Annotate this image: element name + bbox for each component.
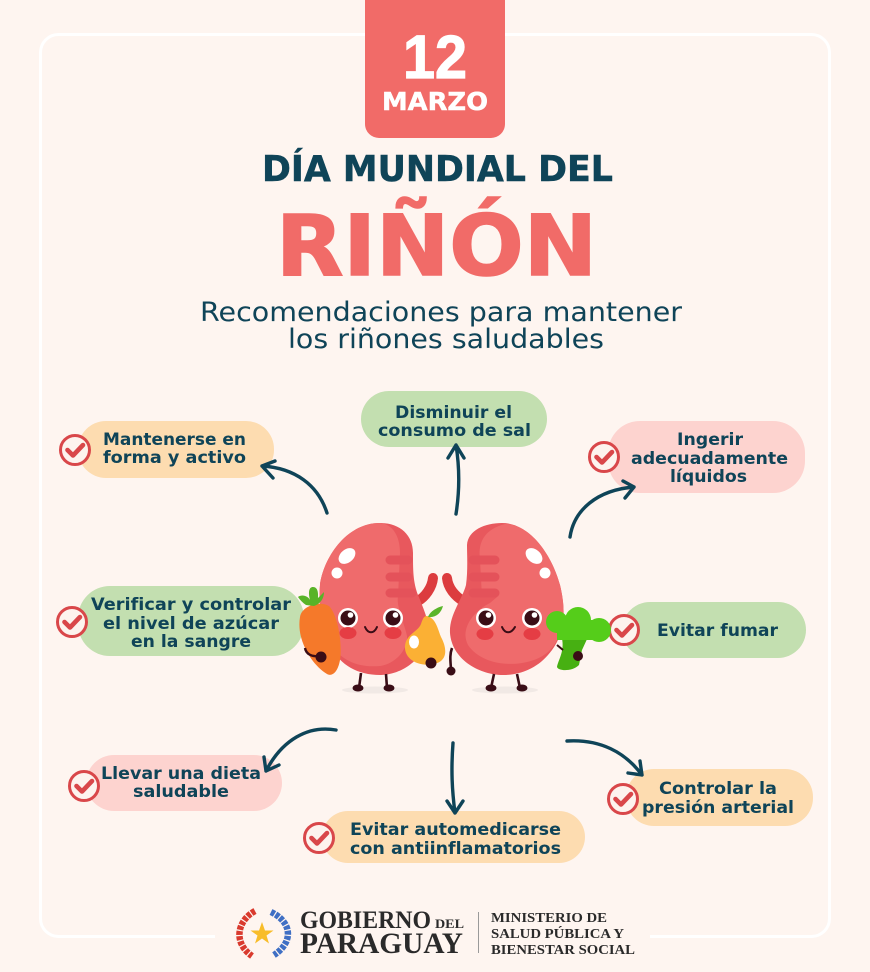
recommendation: líquidos [590, 421, 805, 493]
recommendation: líquidos: líquidos [670, 467, 747, 486]
gobierno del paraguay wordmark: GOBIERNO [300, 907, 431, 934]
carrot [299, 604, 341, 675]
arrow: to mantenerse en forma [262, 461, 327, 513]
kidney legs [359, 673, 520, 688]
recommendation: disminuir sal [361, 391, 547, 447]
broccoli [557, 635, 588, 670]
recommendation: automedicarse [304, 811, 585, 863]
recommendation: presión: presión arterial [642, 798, 794, 817]
illustration: kidney characters [298, 523, 611, 694]
recommendation: líquidos: adecuadamente [631, 449, 788, 468]
arrow: to líquidos [570, 481, 634, 537]
left kidney ground shadow [342, 686, 408, 694]
subtitle: Recomendaciones para mantener [200, 297, 682, 328]
recommendation: azúcar [58, 586, 304, 656]
title: DÍA MUNDIAL DEL [262, 148, 613, 190]
left kidney body [320, 523, 428, 675]
title [262, 148, 613, 295]
recommendation: azúcar: en la sangre [131, 632, 251, 651]
arrow: to presión [567, 741, 642, 775]
left kidney ureter [418, 578, 433, 601]
subtitle [200, 297, 682, 355]
recommendation: evitar fumar: Evitar fumar [657, 621, 779, 640]
recommendation: disminuir sal: Disminuir el [395, 403, 512, 422]
ministerio wordmark [491, 910, 635, 957]
kidney highlights [336, 545, 358, 567]
ministerio wordmark: MINISTERIO DE [491, 910, 607, 925]
right kidney body [450, 523, 564, 675]
recommendation: presión: Controlar la [659, 779, 777, 798]
gobierno del paraguay wordmark: DEL [435, 916, 464, 931]
recommendation: automedicarse: Evitar automedicarse [350, 820, 561, 839]
recommendation: azúcar: el nivel de azúcar [103, 614, 280, 633]
pear [405, 616, 445, 665]
recommendation: dieta: Llevar una dieta [101, 764, 261, 783]
date badge: 12 [403, 23, 467, 91]
recommendation: dieta: saludable [133, 782, 229, 801]
recommendation: disminuir sal: consumo de sal [378, 421, 531, 440]
recommendation: azúcar: Verificar y controlar [91, 595, 292, 614]
kidney faces [338, 608, 358, 628]
recommendation: dieta [70, 755, 282, 811]
icon: national emblem [239, 911, 288, 956]
footer logos [239, 907, 635, 960]
arrow: to automedicarse [447, 743, 463, 813]
recommendation: mantenerse en forma [60, 421, 274, 478]
recommendation: líquidos: Ingerir [677, 430, 744, 449]
recommendation: automedicarse: con antiinflamatorios [350, 839, 561, 858]
ministerio wordmark: SALUD PÚBLICA Y [491, 926, 624, 941]
recommendation: mantenerse en forma: forma y activo [103, 448, 246, 467]
recommendation: presión [608, 769, 813, 826]
date badge: MARZO [382, 87, 488, 116]
recommendation: evitar fumar [610, 602, 806, 658]
arrow: to dieta [264, 729, 336, 771]
arrow: to disminuir sal [448, 445, 464, 514]
right kidney ureter [447, 578, 463, 601]
right kidney ground shadow [472, 686, 538, 694]
ministerio wordmark: BIENESTAR SOCIAL [491, 942, 635, 957]
gobierno del paraguay wordmark [300, 907, 464, 960]
date badge [365, 0, 505, 138]
title: RIÑÓN [276, 197, 597, 295]
subtitle: los riñones saludables [288, 324, 604, 355]
recommendation: mantenerse en forma: Mantenerse en [103, 430, 246, 449]
gobierno del paraguay wordmark: PARAGUAY [300, 927, 463, 960]
